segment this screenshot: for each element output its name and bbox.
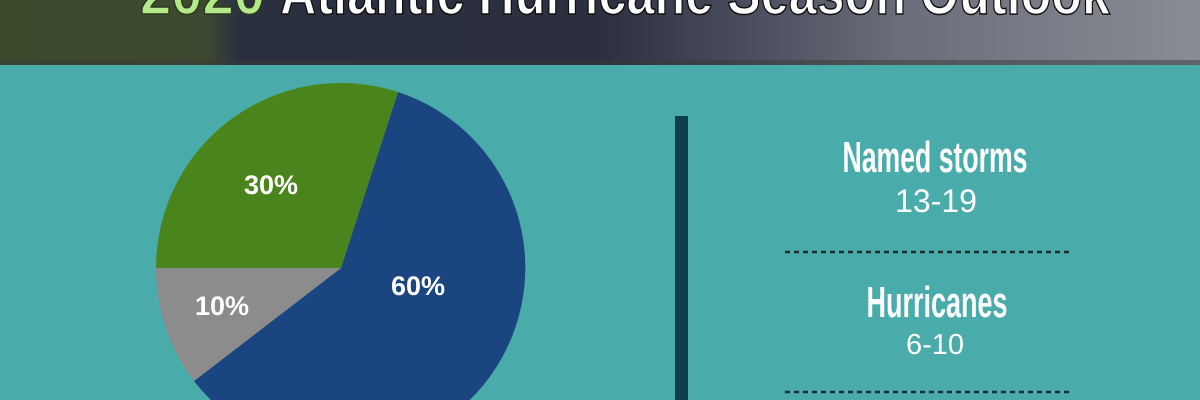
pie labels: 30% (244, 170, 298, 200)
pie slice: 10% gray (156, 268, 341, 381)
stat: named storms (842, 133, 1028, 219)
pie slice: 60% blue (194, 92, 525, 400)
pie labels: 10% (195, 291, 249, 321)
stat: named storms: 13-19 (895, 183, 977, 219)
header: satellite image band (0, 0, 1200, 65)
stat: hurricanes: Hurricanes (866, 278, 1008, 327)
stat: hurricanes: 6-10 (906, 329, 964, 361)
pie slice: 30% green (156, 83, 398, 268)
stat: hurricanes (866, 278, 1008, 361)
pie labels (195, 170, 445, 321)
divider bar (675, 116, 688, 400)
pie chart (156, 83, 525, 400)
pie labels: 60% (391, 271, 445, 301)
stat: named storms: Named storms (842, 133, 1028, 182)
